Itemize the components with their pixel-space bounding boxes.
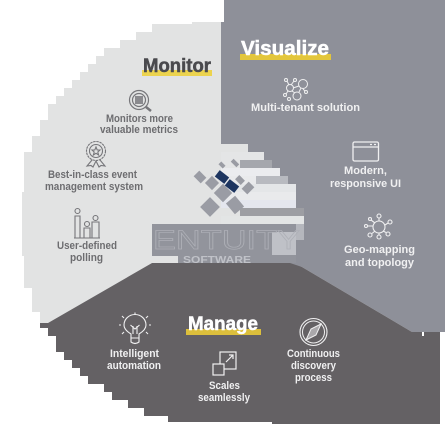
label: Geo-mapping and topology	[344, 244, 415, 269]
label: Monitors more valuable metrics: valuable metrics	[100, 124, 178, 136]
label: Modern, responsive UI	[330, 165, 401, 190]
label: Scales seamlessly	[198, 380, 251, 404]
icon: browser window	[353, 142, 378, 161]
label: Scales seamlessly: seamlessly	[198, 392, 251, 404]
label: Scales seamlessly: Scales	[209, 380, 240, 392]
heading: Visualize: Visualize	[241, 38, 329, 60]
label: Continuous discovery process: discovery	[291, 360, 337, 372]
label: Geo-mapping and topology: and topology	[345, 257, 415, 269]
label: Monitors more valuable metrics: Monitors more	[106, 113, 173, 125]
label: User-defined polling: User-defined	[57, 240, 117, 252]
icon: scale arrows	[213, 352, 236, 375]
label: Multi-tenant solution: Multi-tenant solution	[251, 102, 360, 114]
label: Continuous discovery process	[287, 348, 340, 384]
logo: wordmark: SOFTWARE	[183, 255, 251, 266]
panel: manage segment	[40, 263, 440, 424]
icon: compass	[300, 318, 327, 346]
heading: Manage: Manage	[188, 314, 258, 335]
logo: diamond mark	[194, 159, 254, 217]
label: Monitors more valuable metrics	[100, 113, 178, 136]
label: User-defined polling: polling	[70, 252, 103, 264]
label: Continuous discovery process: Continuous	[287, 348, 340, 360]
label: Continuous discovery process: process	[295, 372, 332, 384]
logo: wordmark: ENTUITY	[153, 225, 300, 255]
label: Best-in-class event management system: management system	[45, 181, 143, 193]
icon: magnifier	[130, 90, 151, 111]
icon: network	[284, 78, 308, 100]
icon: polling stations	[74, 208, 100, 238]
icon: light bulb	[119, 312, 151, 344]
icon: award ribbon	[86, 142, 106, 167]
label: Best-in-class event management system	[45, 169, 143, 193]
panel: visualize segment	[221, 0, 445, 332]
label: Intelligent automation	[107, 348, 161, 372]
icon: geo-mapping nodes	[364, 214, 392, 239]
label: Geo-mapping and topology: Geo-mapping	[344, 244, 415, 256]
label: Intelligent automation: automation	[107, 360, 161, 372]
heading: Monitor: Monitor	[143, 56, 212, 77]
center logo patch	[152, 144, 304, 263]
label: Best-in-class event management system: Best-in-class event	[48, 169, 137, 181]
label: Modern, responsive UI: responsive UI	[330, 178, 401, 190]
logo: wordmark	[153, 225, 300, 266]
label: User-defined polling	[57, 240, 117, 264]
label: Modern, responsive UI: Modern,	[344, 165, 387, 177]
label: Intelligent automation: Intelligent	[110, 348, 159, 360]
panel: monitor segment	[22, 22, 221, 323]
